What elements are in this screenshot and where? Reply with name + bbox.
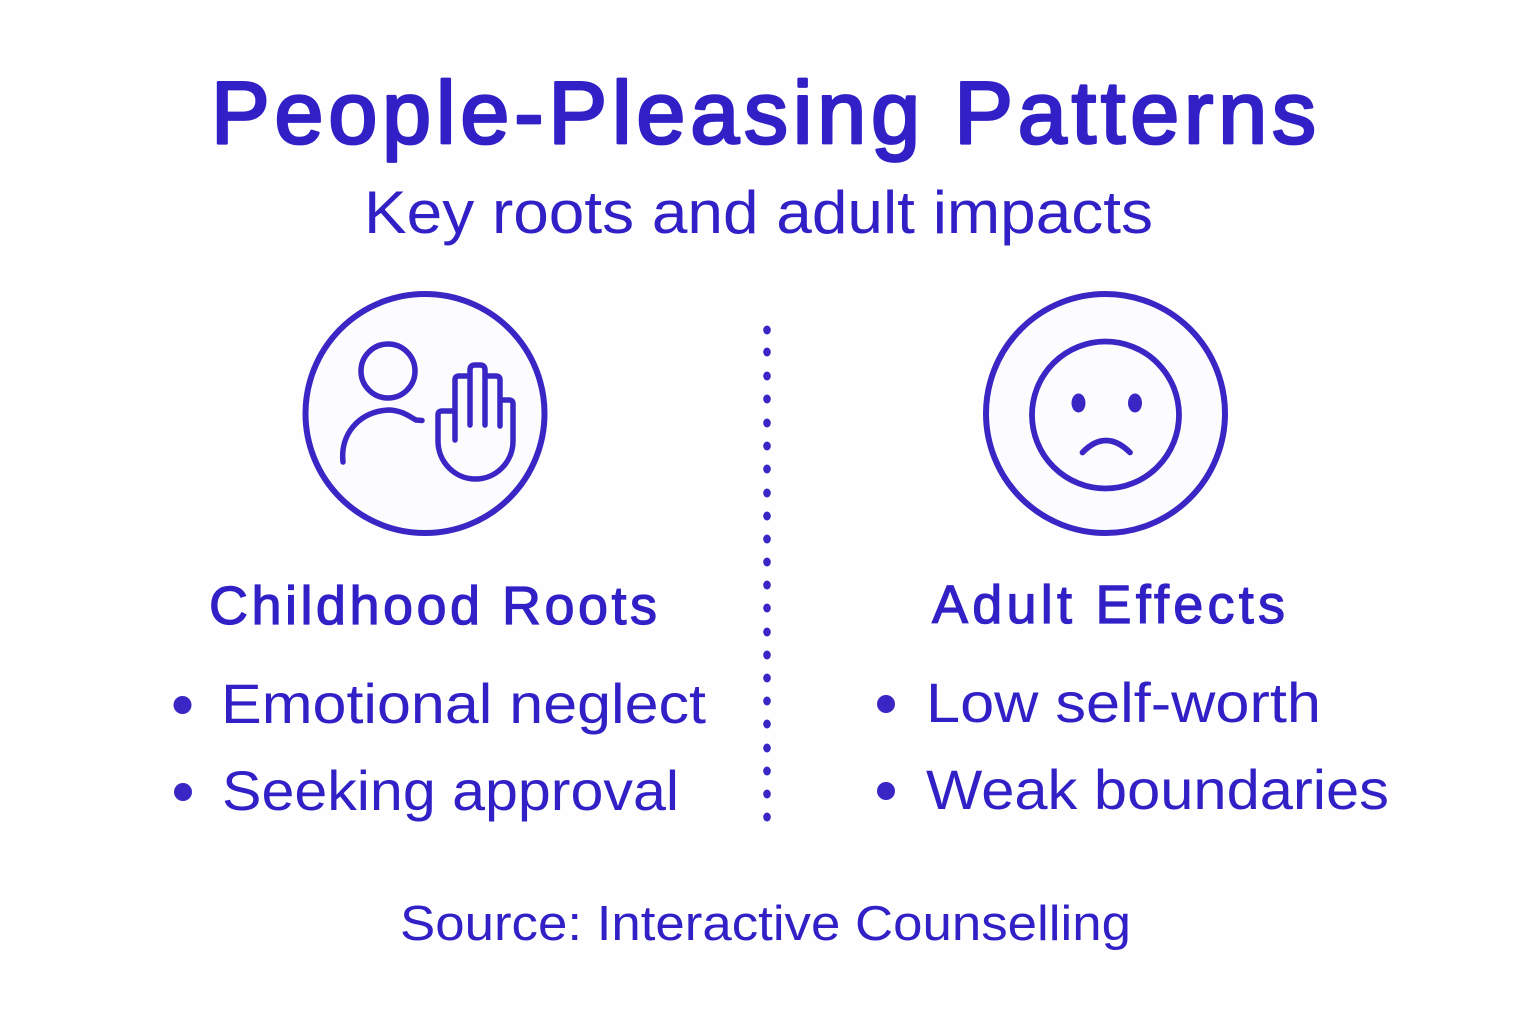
source note: Source: Interactive Counselling bbox=[400, 897, 1131, 951]
list: adult effects: Weak boundaries bbox=[926, 758, 1389, 821]
panel: adult effects bbox=[877, 294, 1389, 821]
list: childhood roots: Emotional neglect bbox=[221, 672, 706, 735]
heading: childhood roots: Childhood Roots bbox=[209, 576, 657, 636]
icon: person with raised hand bbox=[306, 294, 544, 533]
icon: sad face bbox=[986, 294, 1225, 533]
title: People-Pleasing Patterns bbox=[211, 63, 1316, 162]
list: adult effects bbox=[877, 671, 1389, 821]
heading: adult effects: Adult Effects bbox=[932, 575, 1285, 635]
dotted divider bbox=[763, 326, 771, 822]
list: childhood roots: Seeking approval bbox=[222, 759, 679, 822]
list: childhood roots bbox=[174, 672, 706, 822]
subtitle: Key roots and adult impacts bbox=[364, 179, 1153, 246]
list: adult effects: Low self-worth bbox=[926, 671, 1321, 734]
panel: childhood roots bbox=[174, 294, 706, 822]
